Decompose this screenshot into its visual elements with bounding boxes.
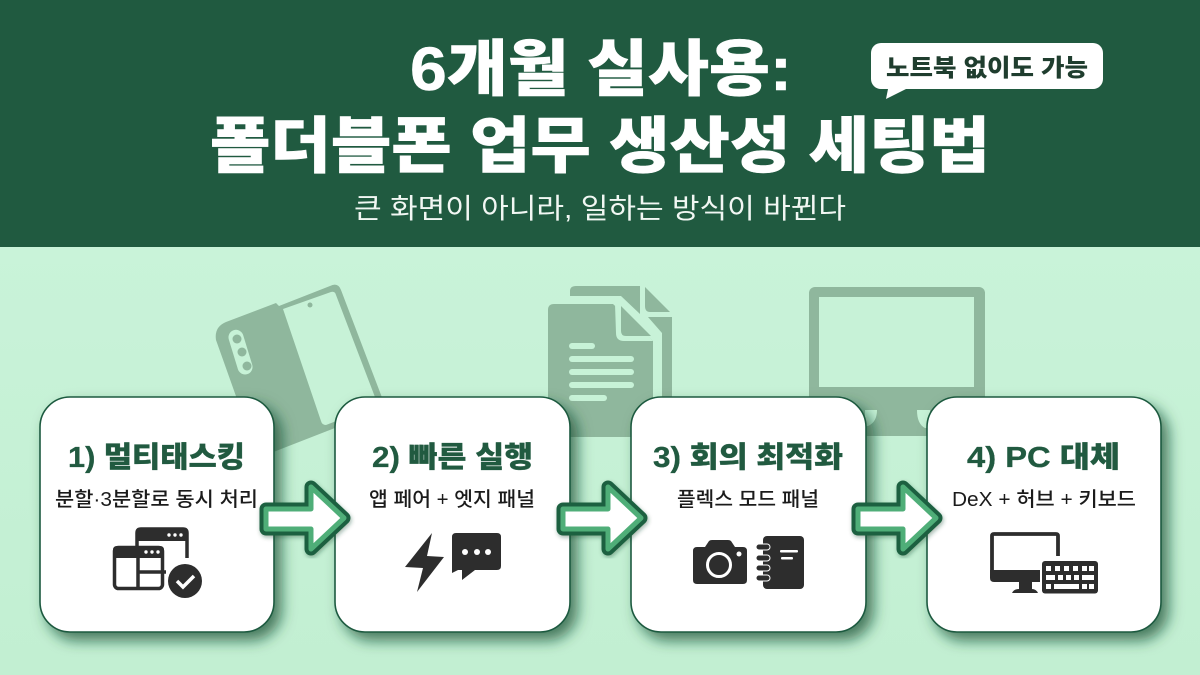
icon: ghost foldable phone — [216, 285, 386, 458]
card 3 description: 플렉스 모드 패널 — [677, 488, 819, 511]
panel: 1) multitasking — [40, 397, 274, 632]
header band — [0, 0, 1200, 247]
card 2 description: 앱 페어 + 엣지 패널 — [369, 488, 535, 511]
icon: ghost documents — [548, 286, 672, 437]
card 1 description: 분할·3분할로 동시 처리 — [55, 488, 258, 511]
arrow 3 — [858, 487, 936, 549]
icon: camera and notebook — [693, 536, 804, 589]
card 4 description: DeX + 허브 + 키보드 — [952, 488, 1136, 511]
card 3 heading: 3) 회의 최적화 — [653, 441, 843, 474]
panel: 3) meeting optimization — [631, 397, 866, 632]
card 4 heading: 4) PC 대체 — [967, 441, 1120, 474]
panel: 4) PC replacement — [927, 397, 1161, 632]
subtitle: 큰 화면이 아니라, 일하는 방식이 바뀐다 — [354, 193, 846, 224]
panel: 2) quick launch — [335, 397, 570, 632]
callout: speech bubble — [871, 43, 1103, 99]
icon: ghost monitor — [809, 287, 985, 436]
callout: speech bubble: 노트북 없이도 가능 — [886, 55, 1088, 82]
arrow 2 — [563, 487, 641, 549]
card 2 heading: 2) 빠른 실행 — [372, 441, 533, 474]
card 1 heading: 1) 멀티태스킹 — [68, 441, 245, 474]
arrow 1 — [266, 487, 344, 549]
icon: split windows with check — [113, 529, 204, 600]
title line 1: 6개월 실사용: — [410, 35, 792, 103]
background — [0, 247, 1200, 675]
title line 2: 폴더블폰 업무 생산성 세팅법 — [210, 112, 990, 180]
icon: monitor and keyboard — [990, 534, 1098, 594]
icon: lightning and chat bubble — [405, 533, 501, 592]
